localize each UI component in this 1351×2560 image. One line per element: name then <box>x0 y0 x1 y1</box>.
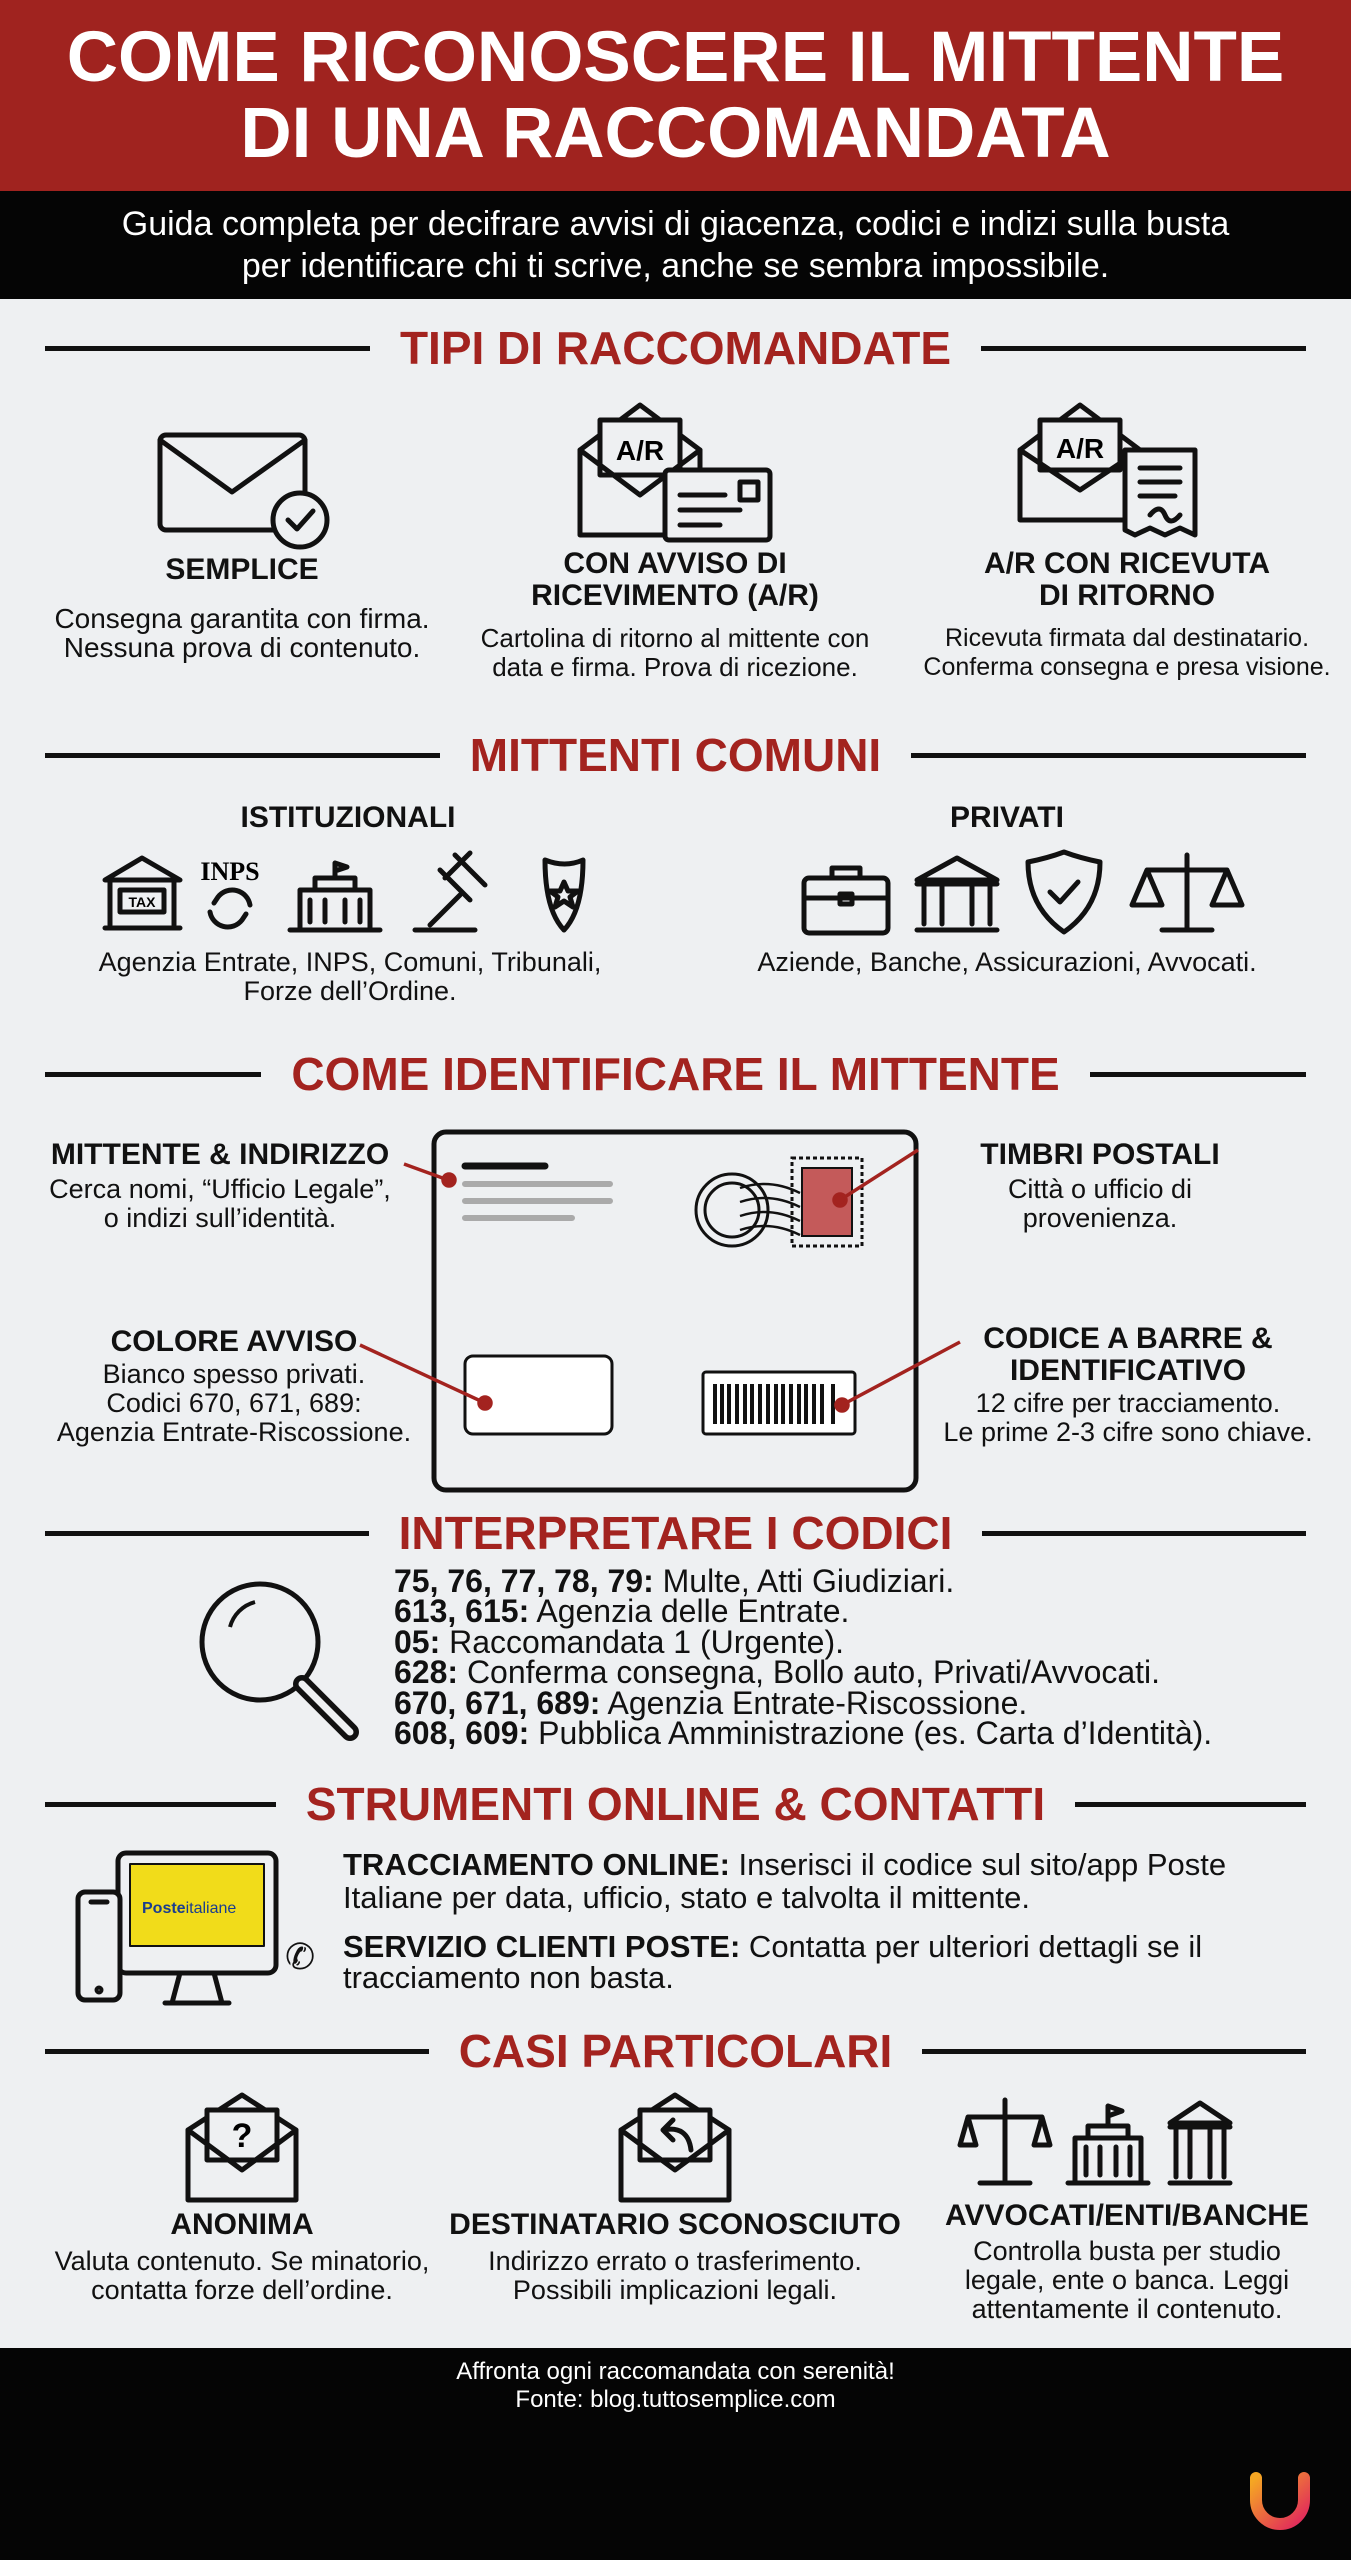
callout: codice a barre: 12 cifre per tracciamento. <box>976 1388 1280 1418</box>
item: destinatario sconosciuto: DESTINATARIO SCONOSCIUTO <box>449 2208 901 2241</box>
icon: A/R envelope with receipt <box>1018 402 1198 538</box>
item: con avviso di ricevimento: data e firma. Prova di ricezione. <box>492 652 858 682</box>
item: anonima <box>54 2208 429 2305</box>
callout: timbri postali: Città o ufficio di <box>1008 1174 1192 1204</box>
icon: monitor and phone: Posteitaliane <box>142 1900 236 1917</box>
callout: codice a barre: IDENTIFICATIVO <box>1010 1354 1246 1387</box>
text: codes list: 628: Conferma consegna, Bollo auto, Privati/Avvocati. <box>394 1654 1160 1690</box>
heading: interpretare i codici <box>45 1507 1306 1559</box>
text: private examples: Aziende, Banche, Assicurazioni, Avvocati. <box>757 947 1257 977</box>
text: codes list: 05: Raccomandata 1 (Urgente). <box>394 1624 844 1660</box>
item: avvocati/enti/banche: attentamente il contenuto. <box>972 2294 1282 2324</box>
icon: anonymous envelope <box>186 2092 298 2202</box>
text: institutional examples: Forze dell’Ordine. <box>243 976 457 1006</box>
icon: magnifier <box>200 1582 359 1741</box>
item: anonima: contatta forze dell’ordine. <box>91 2275 393 2305</box>
item: A/R con ricevuta <box>923 547 1331 681</box>
icon: return envelope <box>618 2092 732 2202</box>
item: avvocati/enti/banche: legale, ente o banca. Leggi <box>965 2265 1289 2295</box>
heading: strumenti online & contatti: STRUMENTI ONLINE & CONTATTI <box>306 1778 1045 1830</box>
item: A/R con ricevuta: Conferma consegna e presa visione. <box>923 653 1331 681</box>
item: con avviso di ricevimento <box>481 547 869 682</box>
icon: scale, building, bank <box>958 2098 1232 2186</box>
icon: logo <box>1250 2472 1310 2530</box>
heading: tipi di raccomandate: TIPI DI RACCOMANDATE <box>400 322 951 374</box>
icons: private <box>802 850 1244 936</box>
header: title band: DI UNA RACCOMANDATA <box>240 94 1111 173</box>
panel: tipi <box>54 402 1331 682</box>
heading: mittenti comuni: MITTENTI COMUNI <box>470 729 881 781</box>
item: avvocati/enti/banche <box>945 2199 1309 2324</box>
text: tracciamento online <box>343 1847 1226 1915</box>
heading: casi particolari: CASI PARTICOLARI <box>459 2025 892 2077</box>
callout: mittente & indirizzo: o indizi sull’identità. <box>104 1203 336 1233</box>
heading: strumenti online & contatti <box>45 1778 1306 1830</box>
callout: codice a barre <box>943 1322 1313 1447</box>
callout: codice a barre: Le prime 2-3 cifre sono chiave. <box>943 1417 1313 1447</box>
callout: colore avviso: COLORE AVVISO <box>111 1325 357 1358</box>
item: destinatario sconosciuto: Indirizzo errato o trasferimento. <box>488 2246 862 2276</box>
callout: timbri postali: provenienza. <box>1023 1203 1177 1233</box>
item: semplice: SEMPLICE <box>165 553 319 586</box>
text: codes list: 75, 76, 77, 78, 79: Multe, Atti Giudiziari. <box>394 1563 954 1599</box>
footer: Affronta ogni raccomandata con serenità! <box>456 2358 895 2385</box>
subtitle band: per identificare chi ti scrive, anche se sembra impossibile. <box>242 247 1109 285</box>
item: anonima: Valuta contenuto. Se minatorio, <box>55 2246 429 2276</box>
item: A/R con ricevuta: Ricevuta firmata dal destinatario. <box>945 624 1309 652</box>
callout: codice a barre: CODICE A BARRE & <box>983 1322 1273 1355</box>
item: semplice <box>54 553 430 663</box>
callout: colore avviso <box>57 1325 411 1447</box>
item: destinatario sconosciuto: Possibili implicazioni legali. <box>513 2275 837 2305</box>
heading: interpretare i codici: INTERPRETARE I CODICI <box>399 1507 952 1559</box>
item: A/R con ricevuta: DI RITORNO <box>1039 579 1215 612</box>
item: avvocati/enti/banche: Controlla busta per studio <box>973 2236 1281 2266</box>
text: codes list: 613, 615: Agenzia delle Entrate. <box>394 1593 849 1629</box>
text: institutional examples <box>98 947 601 1006</box>
heading: mittenti comuni <box>45 729 1306 781</box>
panel: privati <box>757 801 1257 977</box>
item: semplice: Nessuna prova di contenuto. <box>64 632 420 663</box>
text: codes list: 608, 609: Pubblica Amministrazione (es. Carta d’Identità). <box>394 1715 1212 1751</box>
icon: anonymous envelope: ? <box>232 2117 252 2155</box>
text: tracciamento online: Italiane per data, ufficio, stato e talvolta il mittente. <box>343 1880 1030 1915</box>
callout: mittente & indirizzo: MITTENTE & INDIRIZZO <box>51 1138 389 1171</box>
header: title band <box>0 0 1351 191</box>
item: con avviso di ricevimento: RICEVIMENTO (A/R) <box>531 579 819 612</box>
heading: come identificare il mittente <box>45 1048 1306 1100</box>
callout: mittente & indirizzo <box>49 1138 391 1233</box>
icon: monitor and phone <box>76 1850 278 2006</box>
icons: institutional <box>102 850 586 932</box>
panel: casi particolari <box>54 2092 1309 2324</box>
icons: institutional: TAX <box>129 894 156 910</box>
heading: tipi di raccomandate <box>45 322 1306 374</box>
text: codes list <box>394 1563 1212 1751</box>
item: destinatario sconosciuto <box>449 2208 901 2305</box>
icons: institutional: INPS <box>200 857 260 886</box>
subtitle band: Guida completa per decifrare avvisi di giacenza, codici e indizi sulla busta <box>122 205 1229 243</box>
footer <box>0 2348 1351 2560</box>
icon: A/R envelope with card <box>578 402 772 542</box>
item: avvocati/enti/banche: AVVOCATI/ENTI/BANCHE <box>945 2199 1309 2232</box>
text: codes list: 670, 671, 689: Agenzia Entrate-Riscossione. <box>394 1685 1027 1721</box>
callout: colore avviso: Bianco spesso privati. <box>103 1359 365 1389</box>
item: con avviso di ricevimento: CON AVVISO DI <box>563 547 787 580</box>
footer: Fonte: blog.tuttosemplice.com <box>515 2386 836 2413</box>
label: istituzionali: ISTITUZIONALI <box>240 801 455 834</box>
item: anonima: ANONIMA <box>170 2208 314 2241</box>
callout: timbri postali <box>980 1138 1220 1233</box>
callout: colore avviso: Agenzia Entrate-Riscossione. <box>57 1417 411 1447</box>
callout: timbri postali: TIMBRI POSTALI <box>980 1138 1220 1171</box>
envelope diagram <box>359 1130 961 1492</box>
panel: istituzionali <box>98 801 601 1006</box>
heading: come identificare il mittente: COME IDENTIFICARE IL MITTENTE <box>291 1048 1060 1100</box>
icon: A/R envelope with card: A/R <box>616 435 664 466</box>
text: tracciamento online: TRACCIAMENTO ONLINE: Inserisci il codice sul sito/app Poste <box>343 1847 1226 1882</box>
subtitle band <box>0 191 1351 299</box>
text: servizio clienti: SERVIZIO CLIENTI POSTE: Contatta per ulteriori dettagli se il <box>343 1929 1202 1964</box>
item: semplice: Consegna garantita con firma. <box>54 603 430 634</box>
text: servizio clienti: tracciamento non basta. <box>343 1960 674 1995</box>
heading: casi particolari <box>45 2025 1306 2077</box>
text: servizio clienti <box>343 1929 1202 1995</box>
icon: envelope with check <box>158 432 330 550</box>
header: title band: COME RICONOSCERE IL MITTENTE <box>67 18 1284 97</box>
callout: mittente & indirizzo: Cerca nomi, “Ufficio Legale”, <box>49 1174 391 1204</box>
item: con avviso di ricevimento: Cartolina di ritorno al mittente con <box>481 623 869 653</box>
icon: A/R envelope with receipt: A/R <box>1056 433 1104 464</box>
label: privati: PRIVATI <box>950 801 1064 834</box>
text: institutional examples: Agenzia Entrate, INPS, Comuni, Tribunali, <box>99 947 601 977</box>
callout: colore avviso: Codici 670, 671, 689: <box>106 1388 362 1418</box>
item: A/R con ricevuta: A/R CON RICEVUTA <box>984 547 1270 580</box>
icon: phone: ✆ <box>285 1936 315 1977</box>
